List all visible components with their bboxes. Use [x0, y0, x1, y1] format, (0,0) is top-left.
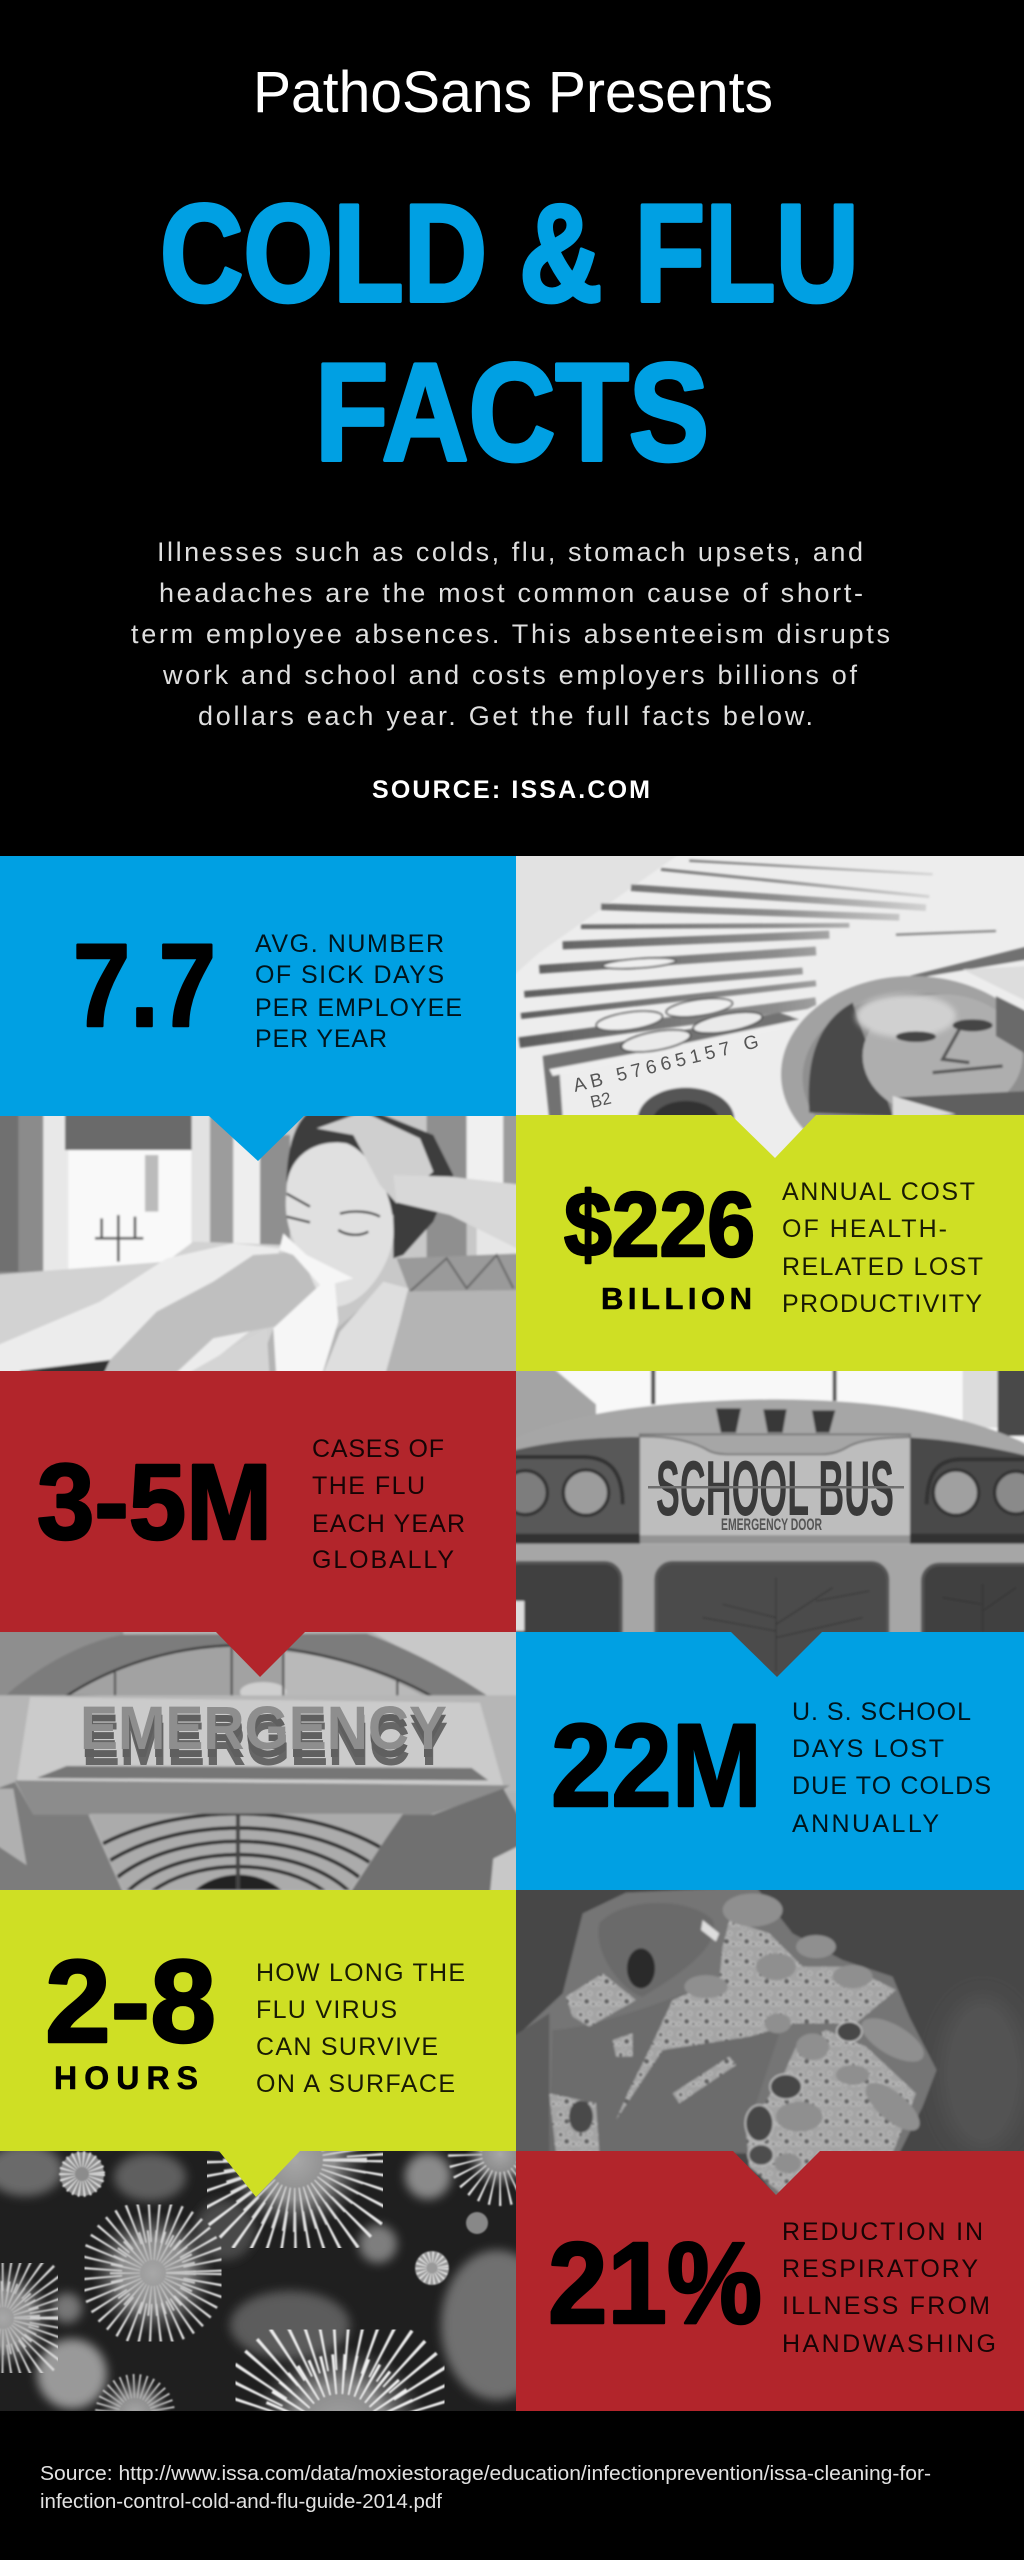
- photo: school bus: EMERGENCY DOOR: [721, 1515, 822, 1534]
- intro paragraph: term employee absences. This absenteeism disrupts: [131, 619, 890, 649]
- label: annual cost: OF HEALTH-: [782, 1215, 947, 1243]
- photo: emergency entrance: [0, 1632, 516, 1890]
- label: virus survival: ON A SURFACE: [256, 2070, 455, 2098]
- sign lettering: EMERGENCY: [81, 1702, 447, 1770]
- footer source: infection-control-cold-and-flu-guide-2014.pdf: [40, 2491, 442, 2513]
- label: flu cases: GLOBALLY: [312, 1546, 454, 1574]
- label: virus survival: FLU VIRUS: [256, 1996, 397, 2024]
- sign lettering: EMERGENCY: [80, 1694, 447, 1762]
- header section: [131, 60, 890, 804]
- title: [160, 176, 859, 490]
- sign lettering: EMERGENCY: [82, 1710, 448, 1778]
- stat: $226 billion: [564, 1174, 755, 1316]
- presenter line: PathoSans Presents: [253, 60, 773, 125]
- spiky virus: bottom: [236, 2330, 444, 2411]
- photo: virus particles: [0, 2151, 516, 2411]
- label: school days: [792, 1698, 991, 1838]
- label: sick days: OF SICK DAYS: [255, 961, 444, 989]
- title: FACTS: [315, 335, 709, 490]
- footer source: Source: http://www.issa.com/data/moxiestorage/education/infectionprevention/issa-cleaning-for-: [40, 2463, 931, 2485]
- label: handwashing: ILLNESS FROM: [782, 2292, 990, 2320]
- title: COLD & FLU: [160, 176, 859, 331]
- intro paragraph: [131, 537, 890, 731]
- stat: 2-8 hours: 2-8: [45, 1936, 216, 2068]
- label: flu cases: [312, 1435, 465, 1574]
- label: virus survival: HOW LONG THE: [256, 1959, 465, 1987]
- photo: money: AB 57665157 G: [571, 1031, 761, 1097]
- photo: woman blowing nose: [0, 1105, 527, 1382]
- label: annual cost: [782, 1178, 983, 1318]
- spiky virus: centre: [91, 2211, 215, 2335]
- label: sick days: PER EMPLOYEE: [255, 994, 462, 1022]
- stat: $226 billion: BILLION: [601, 1281, 752, 1316]
- label: annual cost: ANNUAL COST: [782, 1178, 975, 1206]
- spiky virus: left: [0, 2268, 53, 2368]
- panel: school days: [516, 1632, 1024, 1890]
- photo: school bus: [503, 1368, 1024, 1689]
- footer source: [40, 2463, 931, 2513]
- stat: 21%: 21%: [548, 2218, 762, 2348]
- panel: flu cases: [0, 1371, 516, 1677]
- label: annual cost: PRODUCTIVITY: [782, 1290, 982, 1318]
- label: handwashing: RESPIRATORY: [782, 2255, 978, 2283]
- spiky virus: top middle: [207, 2151, 383, 2248]
- label: handwashing: [782, 2218, 996, 2358]
- stat: 22M: 22M: [551, 1700, 762, 1832]
- label: flu cases: THE FLU: [312, 1472, 425, 1500]
- label: school days: DAYS LOST: [792, 1735, 944, 1763]
- label: sick days: AVG. NUMBER: [255, 930, 444, 958]
- panel: sick days: [0, 856, 516, 1161]
- intro paragraph: Illnesses such as colds, flu, stomach upsets, and: [157, 537, 863, 567]
- label: sick days: [255, 930, 462, 1053]
- small viruses: [58, 2151, 516, 2411]
- label: handwashing: REDUCTION IN: [782, 2218, 983, 2246]
- panel: handwashing: [516, 2151, 1024, 2411]
- photo: money: [509, 849, 1024, 1173]
- label: flu cases: CASES OF: [312, 1435, 444, 1463]
- label: annual cost: RELATED LOST: [782, 1253, 983, 1281]
- stat: 7.7: 7.7: [73, 920, 216, 1052]
- label: virus survival: CAN SURVIVE: [256, 2033, 438, 2061]
- panel: annual cost: [516, 1115, 1024, 1371]
- label: school days: ANNUALLY: [792, 1810, 939, 1838]
- label: flu cases: EACH YEAR: [312, 1510, 465, 1538]
- panel: virus survival: [0, 1890, 516, 2197]
- label: sick days: PER YEAR: [255, 1025, 387, 1053]
- source line: SOURCE: ISSA.COM: [372, 776, 650, 804]
- label: school days: DUE TO COLDS: [792, 1772, 991, 1800]
- label: school days: U. S. SCHOOL: [792, 1698, 971, 1726]
- intro paragraph: work and school and costs employers billions of: [162, 660, 857, 690]
- stat: 3-5M: 3-5M: [37, 1441, 272, 1562]
- intro paragraph: headaches are the most common cause of short-: [159, 578, 863, 608]
- label: handwashing: HANDWASHING: [782, 2330, 996, 2358]
- stat: 2-8 hours: HOURS: [54, 2060, 198, 2096]
- intro paragraph: dollars each year. Get the full facts below.: [198, 701, 813, 731]
- label: virus survival: [256, 1959, 465, 2098]
- photo: soapy hands: [513, 1887, 1024, 2203]
- stat: $226 billion: $226: [564, 1174, 755, 1276]
- photo: money: B2: [588, 1089, 613, 1112]
